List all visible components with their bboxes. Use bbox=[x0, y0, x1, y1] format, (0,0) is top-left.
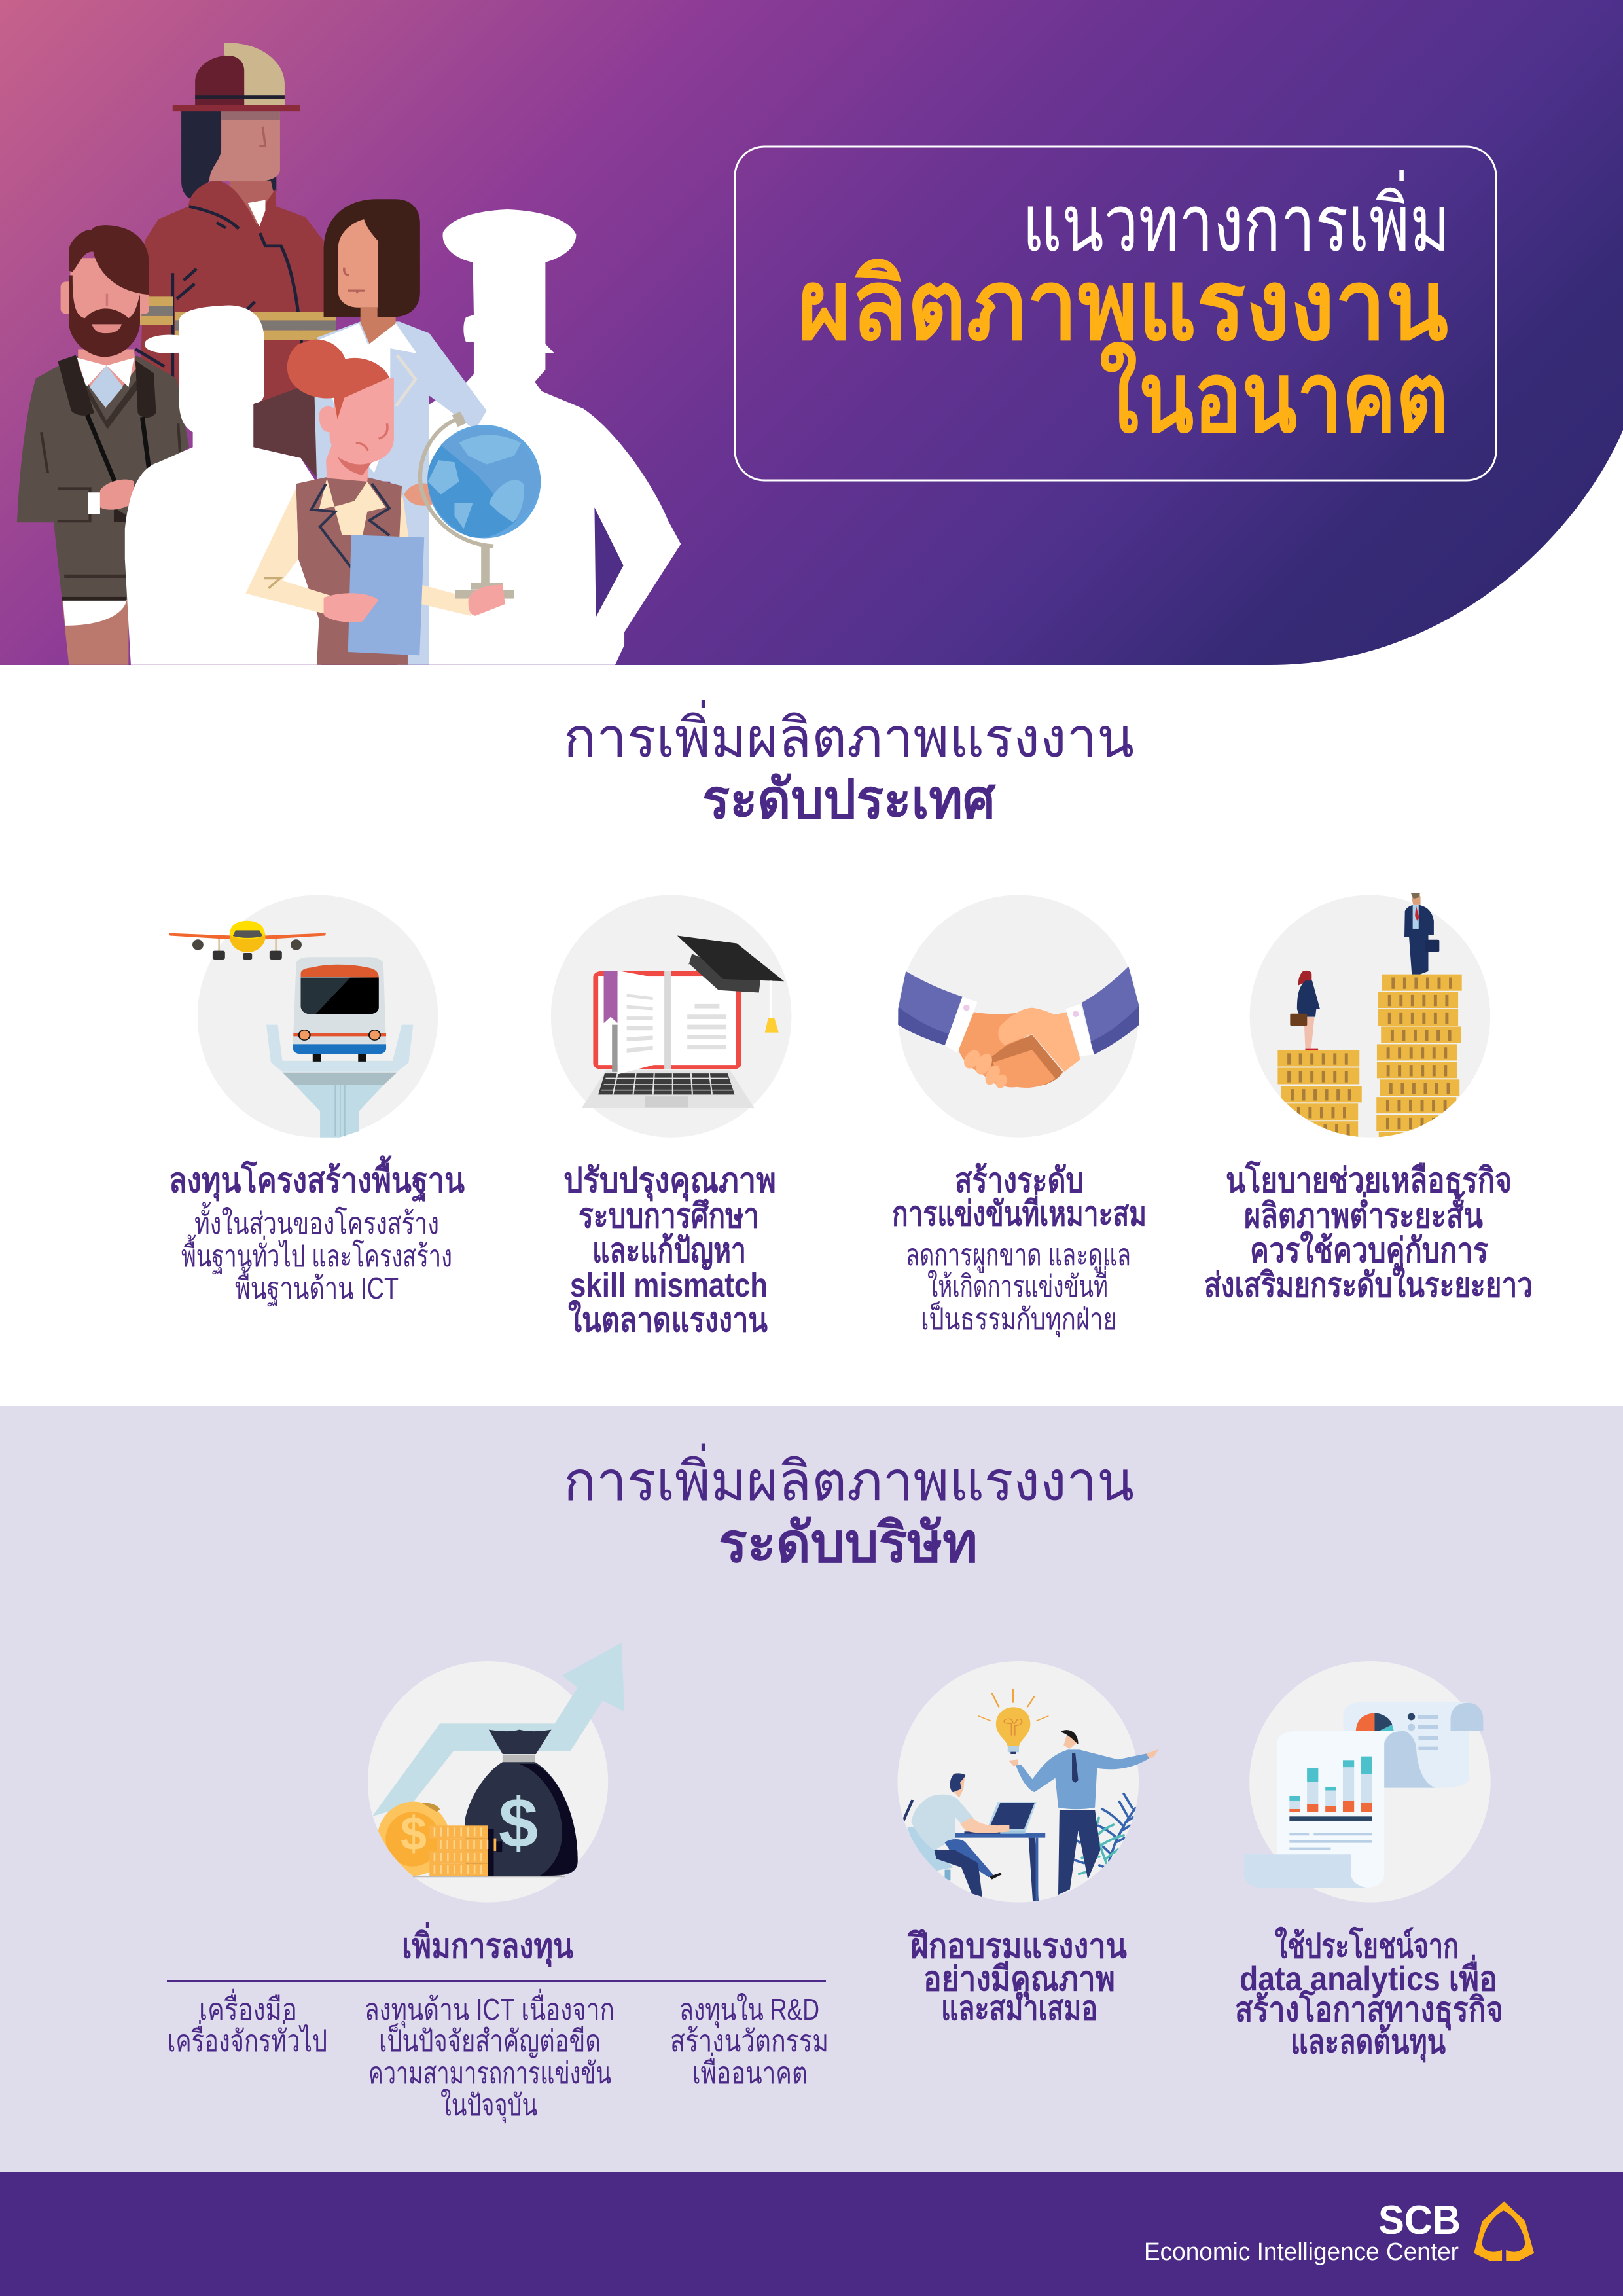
heading: country level: การเพิ่มผลิตภาพแรงงาน bbox=[563, 700, 1134, 768]
column: R&D bbox=[670, 1992, 829, 2090]
description: พื้นฐานด้าน ICT bbox=[235, 1266, 399, 1306]
figure: red-haired woman with globe bbox=[245, 340, 541, 665]
heading: use data analytics: สร้างโอกาสทางธุรกิจ bbox=[1235, 1989, 1503, 2031]
heading: improve education: ปรับปรุงคุณภาพ bbox=[563, 1162, 776, 1202]
plant leaves bbox=[1073, 1794, 1135, 1874]
heading: country level: ระดับประเทศ bbox=[702, 768, 997, 830]
figure: seated worker bbox=[911, 1773, 1045, 1901]
icon label: coin dollar: $ bbox=[401, 1808, 427, 1860]
panel: infrastructure bbox=[169, 895, 465, 1306]
heading: suitable competition: การแข่งขันที่เหมาะสม bbox=[892, 1190, 1147, 1233]
panel: hero banner bbox=[0, 0, 1623, 665]
heading: increase investment: เพิ่มการลงทุน bbox=[402, 1922, 573, 1967]
figure: firefighter bbox=[135, 43, 344, 581]
heading: improve education: ระบบการศึกษา bbox=[579, 1197, 759, 1235]
heading: company level: ระดับบริษัท bbox=[719, 1512, 978, 1573]
icon: training scene bbox=[897, 1661, 1159, 1903]
title box bbox=[735, 147, 1496, 480]
description: ทั้งในส่วนของโครงสร้าง bbox=[194, 1202, 439, 1240]
heading: improve education: และแก้ปัญหา bbox=[592, 1232, 746, 1270]
title line 2: ผลิตภาพแรงงาน bbox=[798, 250, 1448, 360]
heading: company level bbox=[563, 1443, 1134, 1573]
panel: data analytics bbox=[1235, 1661, 1503, 2063]
panel: education bbox=[551, 895, 791, 1339]
heading: improve education: skill mismatch bbox=[570, 1266, 768, 1304]
heading: use data analytics: data analytics เพื่อ bbox=[1240, 1955, 1497, 1998]
description bbox=[906, 1238, 1131, 1338]
heading: training: ฝึกอบรมแรงงาน bbox=[907, 1928, 1127, 1965]
column: tools: เครื่องมือ bbox=[199, 1988, 297, 2026]
brand name: SCB bbox=[1378, 2198, 1461, 2243]
panel: increase investment bbox=[167, 1643, 829, 2124]
icon: money bag and arrow bbox=[368, 1643, 624, 1903]
heading: policy: ส่งเสริมยกระดับในระยะยาว bbox=[1204, 1265, 1533, 1304]
column: tools: เครื่องจักรทั่วไป bbox=[168, 2020, 327, 2058]
heading: improve education bbox=[563, 1162, 776, 1339]
icon: plane and sky train bbox=[169, 895, 438, 1138]
description: ลดการผูกขาด และดูแล bbox=[906, 1238, 1131, 1273]
heading: improve education: ในตลาดแรงงาน bbox=[568, 1300, 768, 1339]
heading: country level bbox=[563, 700, 1134, 830]
heading: use data analytics bbox=[1235, 1926, 1503, 2063]
icon: book laptop and cap bbox=[551, 895, 791, 1138]
column: ICT: ในปัจจุบัน bbox=[440, 2088, 537, 2124]
heading: use data analytics: และลดต้นทุน bbox=[1291, 2023, 1446, 2063]
description bbox=[181, 1202, 452, 1306]
icon: people on coin stacks bbox=[1250, 893, 1490, 1149]
panel: company level background bbox=[0, 1406, 1623, 2172]
heading: training: และสม่ำเสมอ bbox=[941, 1984, 1097, 2028]
figure: businessman bbox=[1404, 893, 1439, 975]
brand subtitle: Economic Intelligence Center bbox=[1144, 2238, 1459, 2266]
heading: policy: นโยบายช่วยเหลือธุรกิจ bbox=[1226, 1160, 1512, 1202]
panel: training bbox=[897, 1661, 1159, 2028]
figure: presenter bbox=[1008, 1730, 1159, 1895]
panel: competition bbox=[892, 895, 1147, 1338]
icon: handshake bbox=[898, 895, 1139, 1138]
heading: policy bbox=[1204, 1160, 1533, 1304]
heading: company level: การเพิ่มผลิตภาพแรงงาน bbox=[563, 1443, 1134, 1512]
footer bar bbox=[0, 2172, 1623, 2296]
figure: brunette scientist bbox=[315, 199, 487, 665]
heading: policy: ผลิตภาพต่ำระยะสั้น bbox=[1244, 1191, 1483, 1235]
column: R&D: สร้างนวัตกรรม bbox=[670, 2024, 829, 2058]
heading: use data analytics: ใช้ประโยชน์จาก bbox=[1275, 1926, 1459, 1965]
column: ICT: เป็นปัจจัยสำคัญต่อขีด bbox=[379, 2023, 601, 2058]
title line 3: ในอนาคต bbox=[1099, 342, 1448, 452]
description: ให้เกิดการแข่งขันที่ bbox=[927, 1265, 1108, 1303]
heading: training: อย่างมีคุณภาพ bbox=[923, 1960, 1115, 2000]
description: เป็นธรรมกับทุกฝ่าย bbox=[921, 1301, 1117, 1338]
heading: training bbox=[907, 1928, 1127, 2028]
heading: suitable competition bbox=[892, 1162, 1147, 1233]
title line 1: แนวทางการเพิ่ม bbox=[1022, 170, 1450, 268]
figure: bearded man bbox=[17, 225, 189, 665]
figure: chef silhouette bbox=[429, 209, 681, 665]
illustration: group of workers bbox=[17, 43, 681, 665]
panel: business assistance policy bbox=[1204, 893, 1533, 1304]
figure: businesswoman bbox=[1290, 971, 1320, 1050]
description: พื้นฐานทั่วไป และโครงสร้าง bbox=[181, 1234, 452, 1274]
column: ICT bbox=[365, 1988, 615, 2124]
icon: SCB logo bbox=[1474, 2201, 1534, 2261]
column: ICT: ลงทุนด้าน ICT เนื่องจาก bbox=[365, 1988, 615, 2028]
figure: cap silhouette bbox=[125, 305, 321, 665]
column: R&D: เพื่ออนาคต bbox=[692, 2052, 808, 2090]
coin stacks bbox=[1277, 975, 1462, 1149]
icon label: dollar: $ bbox=[499, 1783, 538, 1862]
icon: report scroll bbox=[1244, 1661, 1491, 1903]
heading: policy: ควรใช้ควบคู่กับการ bbox=[1250, 1230, 1488, 1272]
heading: invest in infrastructure: ลงทุนโครงสร้างพื้นฐาน bbox=[169, 1155, 465, 1202]
heading: suitable competition: สร้างระดับ bbox=[955, 1162, 1084, 1200]
column: R&D: ลงทุนใน R&D bbox=[679, 1992, 819, 2028]
column: ICT: ความสามารถการแข่งขัน bbox=[368, 2056, 611, 2090]
column: tools bbox=[168, 1988, 327, 2058]
